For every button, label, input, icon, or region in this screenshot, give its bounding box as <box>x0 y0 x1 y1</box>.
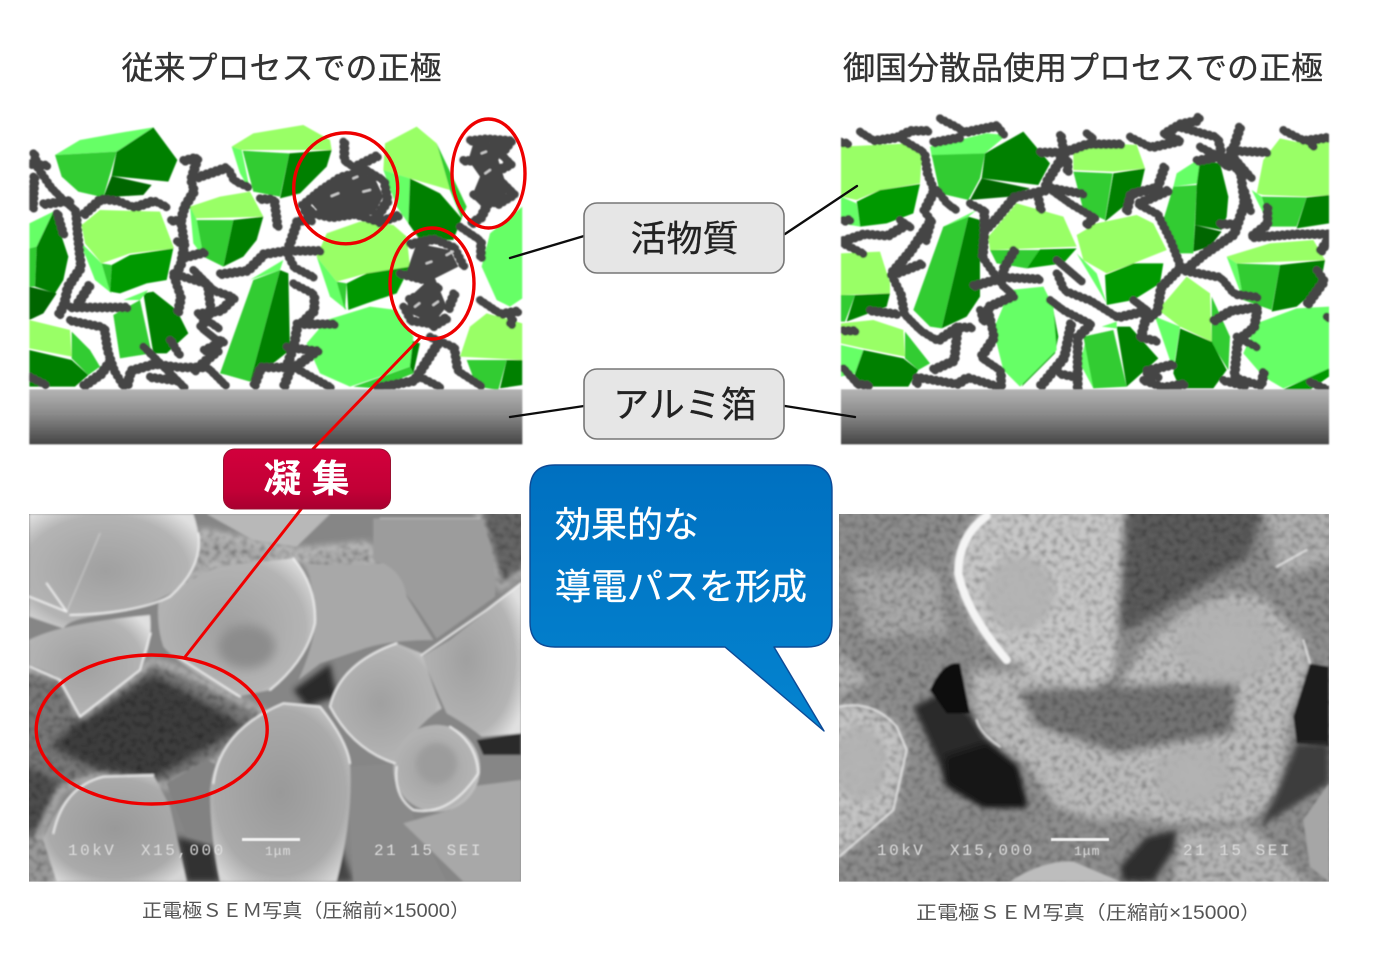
aluminium foil layer right <box>841 389 1329 444</box>
panel: conventional electrode diagram <box>29 125 522 444</box>
SEM scale text left: 1μm <box>265 844 291 859</box>
active material particles left <box>29 125 522 390</box>
label: aluminium foil <box>584 369 784 439</box>
label: aluminium foil: アルミ箔 <box>613 384 757 425</box>
SEM scale text left: 10kV <box>68 842 116 860</box>
callout: effective conductive path <box>530 465 832 731</box>
title: conventional process cathode: 従来プロセスでの正極 <box>122 50 442 86</box>
SEM scale text left <box>68 838 483 860</box>
label: active material: 活物質 <box>630 218 739 259</box>
caption: right SEM: 正電極ＳＥＭ写真（圧縮前×15000） <box>916 902 1261 924</box>
carbon chains left <box>30 138 522 388</box>
panel: dispersed electrode diagram <box>841 115 1331 444</box>
SEM scale text right: 1μm <box>1074 844 1100 859</box>
black voids <box>913 693 1027 807</box>
dark gaps between particles <box>293 663 337 707</box>
callout: effective conductive path: 効果的な <box>555 504 699 545</box>
SEM scale text right: 10kV <box>877 842 925 860</box>
SEM scale text left: X15,000 <box>141 842 226 860</box>
SEM scale text right <box>877 838 1292 860</box>
active material particles right <box>841 132 1329 390</box>
rough background <box>839 514 1329 882</box>
label: agglomeration <box>224 449 390 509</box>
red ellipses marking agglomerates <box>36 119 525 804</box>
label: active material <box>584 203 784 273</box>
callout: effective conductive path: 導電パスを形成 <box>555 566 807 607</box>
bright edges <box>958 516 1007 660</box>
title: Mikuni dispersion process cathode: 御国分散品使用プロセスでの正極 <box>843 50 1323 86</box>
red leader line from clusters to SEM <box>185 338 420 657</box>
panel: SEM photo conventional <box>29 514 521 882</box>
rough grain patches <box>17 507 530 890</box>
SEM scale text right: 21 15 SEI <box>1183 842 1292 860</box>
label: agglomeration: 凝 集 <box>263 459 350 501</box>
SEM scale text left: 21 15 SEI <box>374 842 483 860</box>
small gaps inside agglomerates <box>332 152 490 307</box>
aluminium foil layer left <box>29 389 522 444</box>
SEM scale text right: X15,000 <box>950 842 1035 860</box>
SEM particles <box>29 514 199 628</box>
panel: SEM photo dispersed <box>839 514 1329 882</box>
particle edge highlights <box>29 533 199 717</box>
carbon chains right <box>841 115 1331 392</box>
callout connector lines <box>510 186 857 417</box>
smooth particle faces <box>986 556 1056 632</box>
caption: left SEM: 正電極ＳＥＭ写真（圧縮前×15000） <box>142 900 470 922</box>
